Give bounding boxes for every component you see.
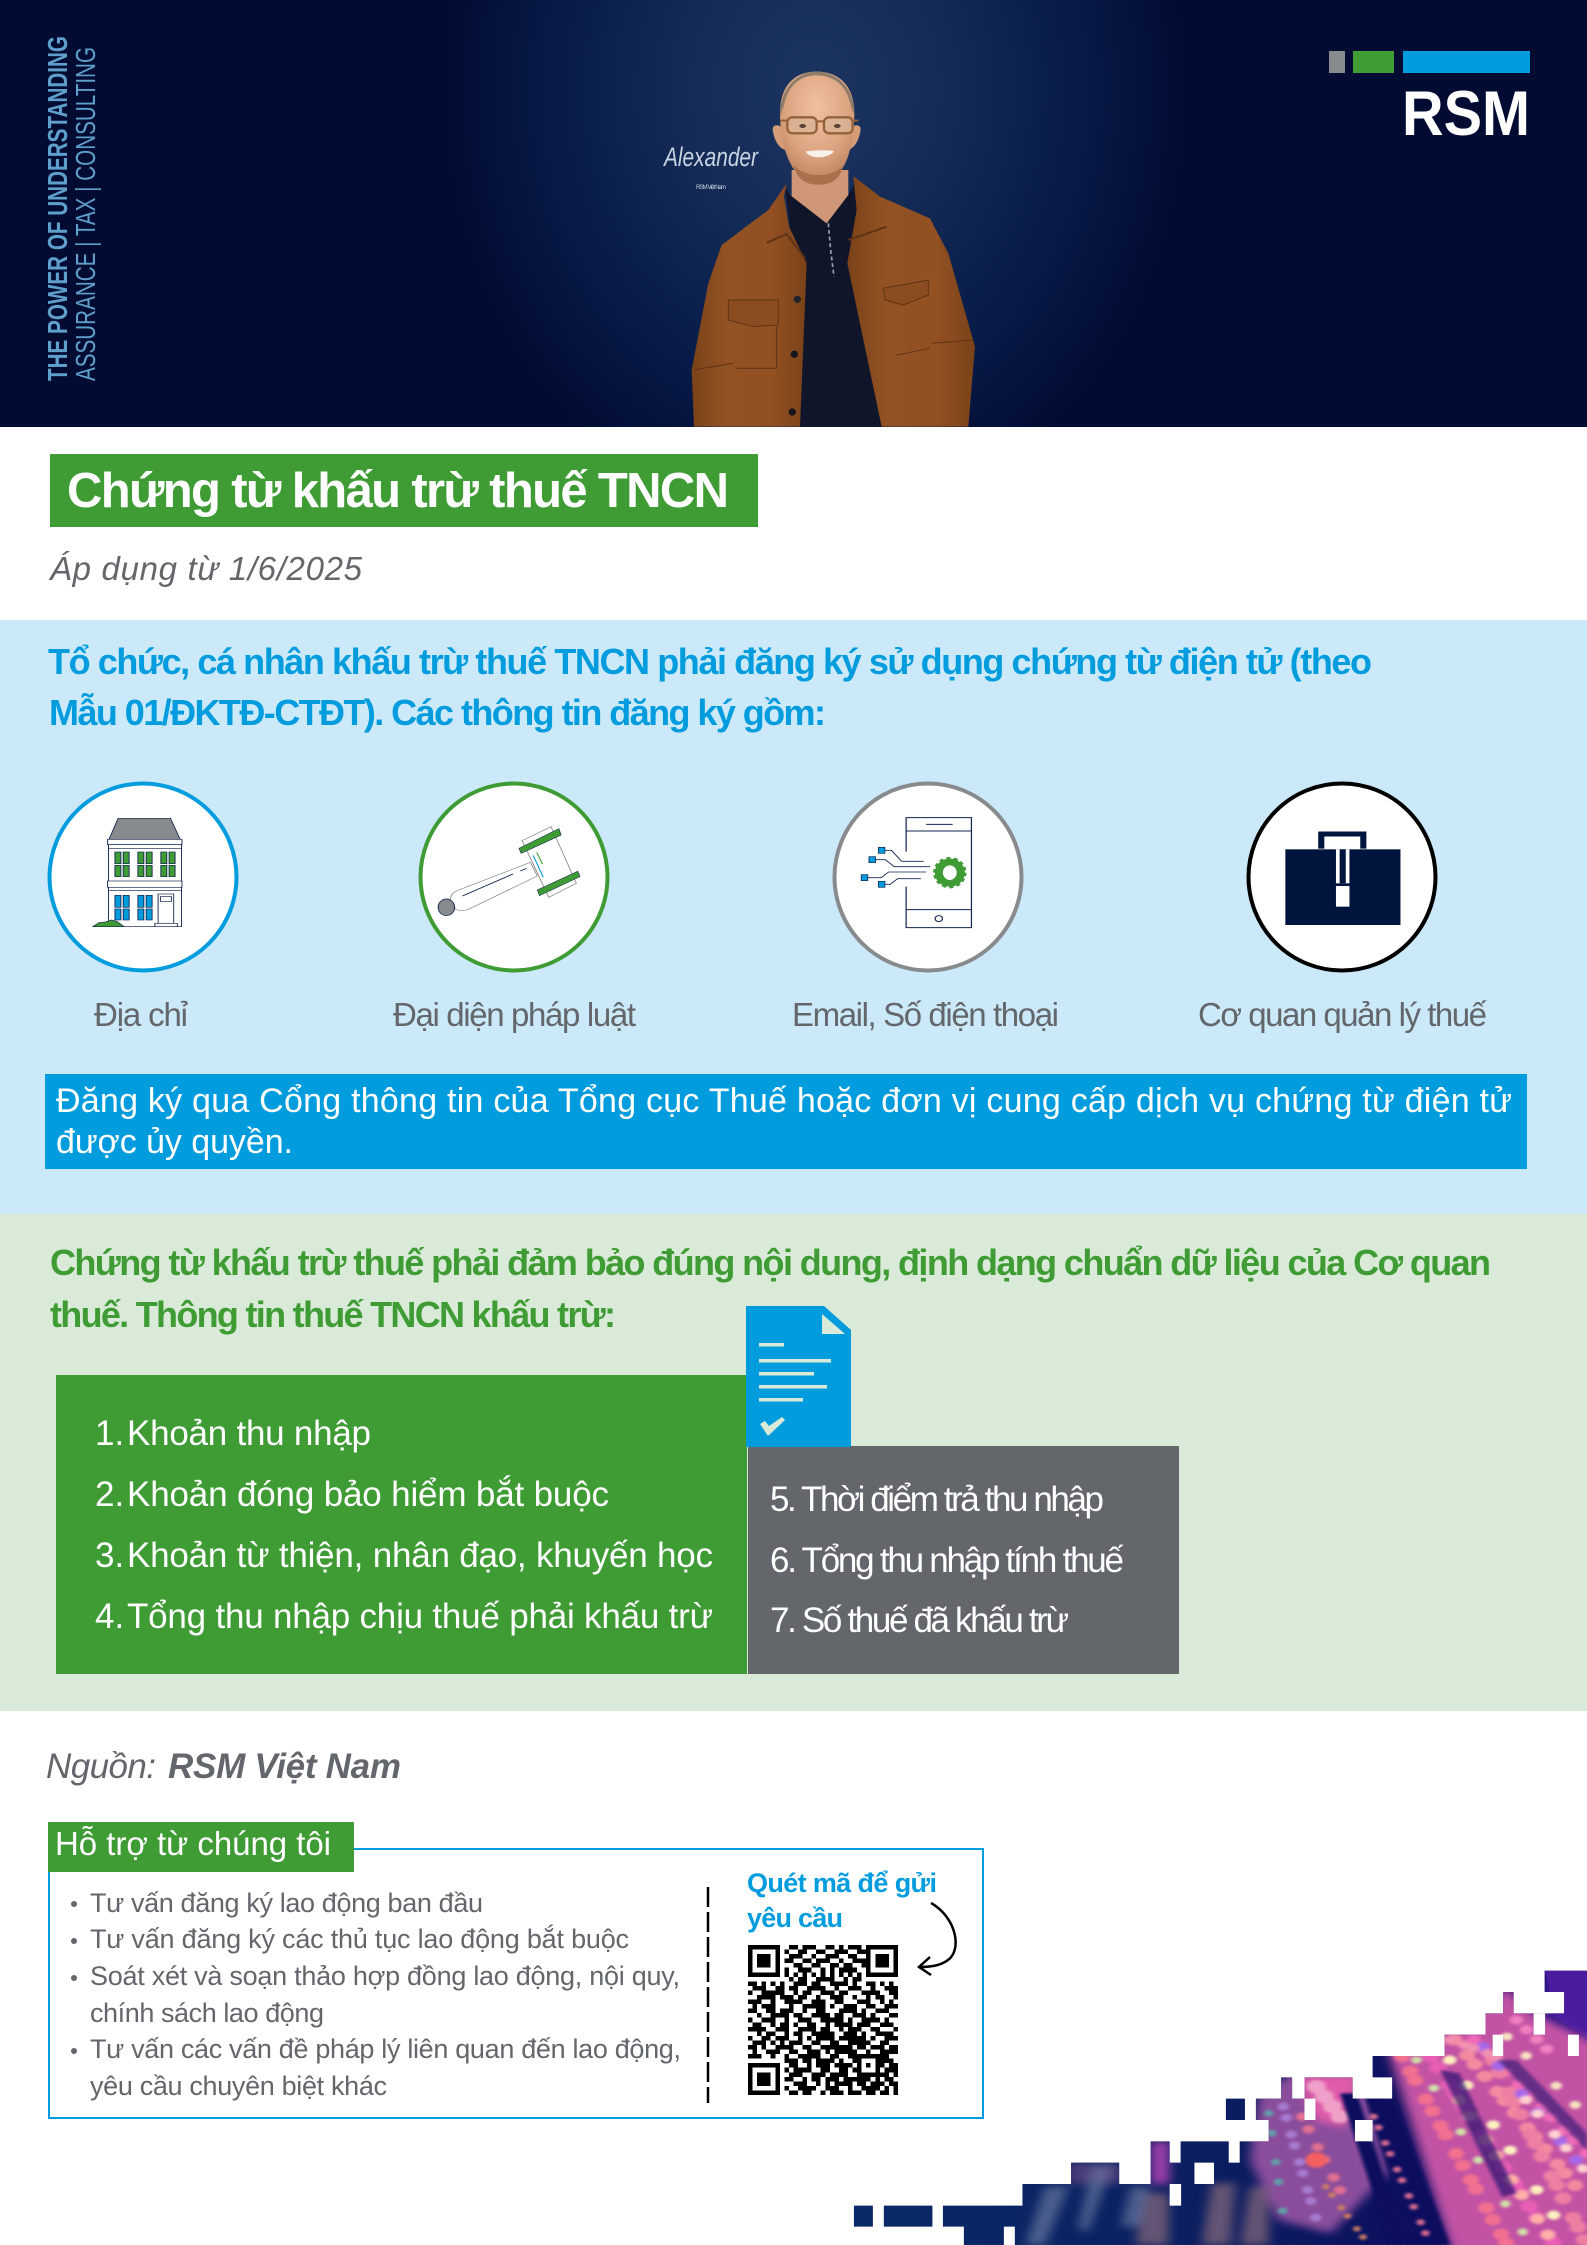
photo: smiling man in brown jacket [692,72,975,427]
list box: items 5 to 7: 6. Tổng thu nhập tính thuế [770,1541,1124,1580]
icon: briefcase [1285,834,1400,925]
panel heading: Tổ chức, cá nhân khấu trừ thuế TNCN phải đăng ký sử dụng chứng từ điện tử (theo [48,641,1372,682]
bullet list of services: Tư vấn các vấn đề pháp lý liên quan đến lao động, [90,2034,681,2064]
panel: header banner [0,0,1587,427]
list box: items 1 to 4: Khoản đóng bảo hiểm bắt buộc [127,1475,609,1514]
subtitle: effective date: Áp dụng từ 1/6/2025 [48,550,363,587]
QR prompt: yêu cầu [747,1903,843,1933]
item: tax authority [1198,784,1487,1033]
item: address [50,784,236,1033]
panel heading: Chứng từ khấu trừ thuế phải đảm bảo đúng nội dung, định dạng chuẩn dữ liệu của Cơ quan [50,1242,1491,1283]
icon: gavel [438,827,580,916]
list box: items 1 to 4: 2. [95,1475,124,1514]
bullet list of services [71,1888,681,2101]
callout: how to register: Đăng ký qua Cổng thông tin của Tổng cục Thuế hoặc đơn vị cung cấp dịch vụ chứng từ điện tử [56,1082,1512,1120]
list box: items 1 to 4: Tổng thu nhập chịu thuế phải khấu trừ [127,1597,713,1636]
callout: how to register: được ủy quyền. [56,1123,293,1161]
list box: items 1 to 4: 3. [95,1536,124,1575]
panel: support from us [48,1822,983,2118]
list box: items 5 to 7: 5. Thời điểm trả thu nhập [770,1480,1104,1519]
bullet list of services: yêu cầu chuyên biệt khác [90,2071,387,2101]
list box: items 1 to 4: Khoản thu nhập [127,1414,371,1453]
panel heading: Hỗ trợ từ chúng tôi [55,1825,331,1862]
panel: registration information [0,620,1587,1214]
QR code [748,1945,898,2095]
icon: building [93,818,182,927]
bullet list of services: chính sách lao động [90,1998,324,2028]
panel heading: Mẫu 01/ĐKTĐ-CTĐT). Các thông tin đăng ký gồm: [49,692,826,733]
source line [46,1747,401,1786]
panel heading [50,1242,1491,1335]
panel heading [48,1822,354,1872]
panel: certificate content [0,1214,1587,1711]
list box: items 1 to 4: 4. [95,1597,124,1636]
panel heading [48,641,1372,733]
icon: phone with gear [861,818,971,928]
list box: items 5 to 7: 7. Số thuế đã khấu trừ [770,1601,1069,1640]
decorative mosaic: bokeh lights [840,1960,1587,2245]
item: legal representative [393,784,636,1033]
bullet list of services: Tư vấn đăng ký các thủ tục lao động bắt buộc [90,1923,629,1954]
label: Địa chỉ [94,996,189,1033]
mosaic white tiles [1004,2013,1579,2245]
logo: RSM: RSM [1402,79,1530,149]
list box: items 5 to 7 [748,1446,1179,1674]
bullet list of services: Tư vấn đăng ký lao động ban đầu [90,1888,483,1918]
label: Email, Số điện thoại [792,996,1059,1033]
title [50,454,758,527]
list box: items 1 to 4: Khoản từ thiện, nhân đạo, khuyến học [127,1536,713,1575]
callout: how to register [45,1074,1527,1169]
signature: Alexander [662,142,759,172]
QR prompt: Quét mã để gửi [747,1868,937,1898]
signature [662,142,759,191]
title: Chứng từ khấu trừ thuế TNCN [67,464,729,518]
label: Đại diện pháp luật [393,996,636,1033]
arrow: to QR code [919,1903,956,1975]
list box: items 1 to 4 [56,1375,747,1674]
list box: items 1 to 4: 1. [95,1414,124,1453]
bullet list of services: Soát xét và soạn thảo hợp đồng lao động, nội quy, [90,1961,680,1991]
QR prompt [747,1868,937,1933]
logo: RSM [1329,51,1530,149]
signature: RSM Việt Nam [696,185,726,191]
vertical tagline [42,36,101,381]
panel heading: thuế. Thông tin thuế TNCN khấu trừ: [50,1294,616,1335]
item: email and phone [792,784,1059,1033]
source line: RSM Việt Nam [168,1747,401,1786]
label: Cơ quan quản lý thuế [1198,996,1487,1033]
icon: document with check [746,1306,851,1447]
source line: Nguồn: [46,1747,156,1786]
